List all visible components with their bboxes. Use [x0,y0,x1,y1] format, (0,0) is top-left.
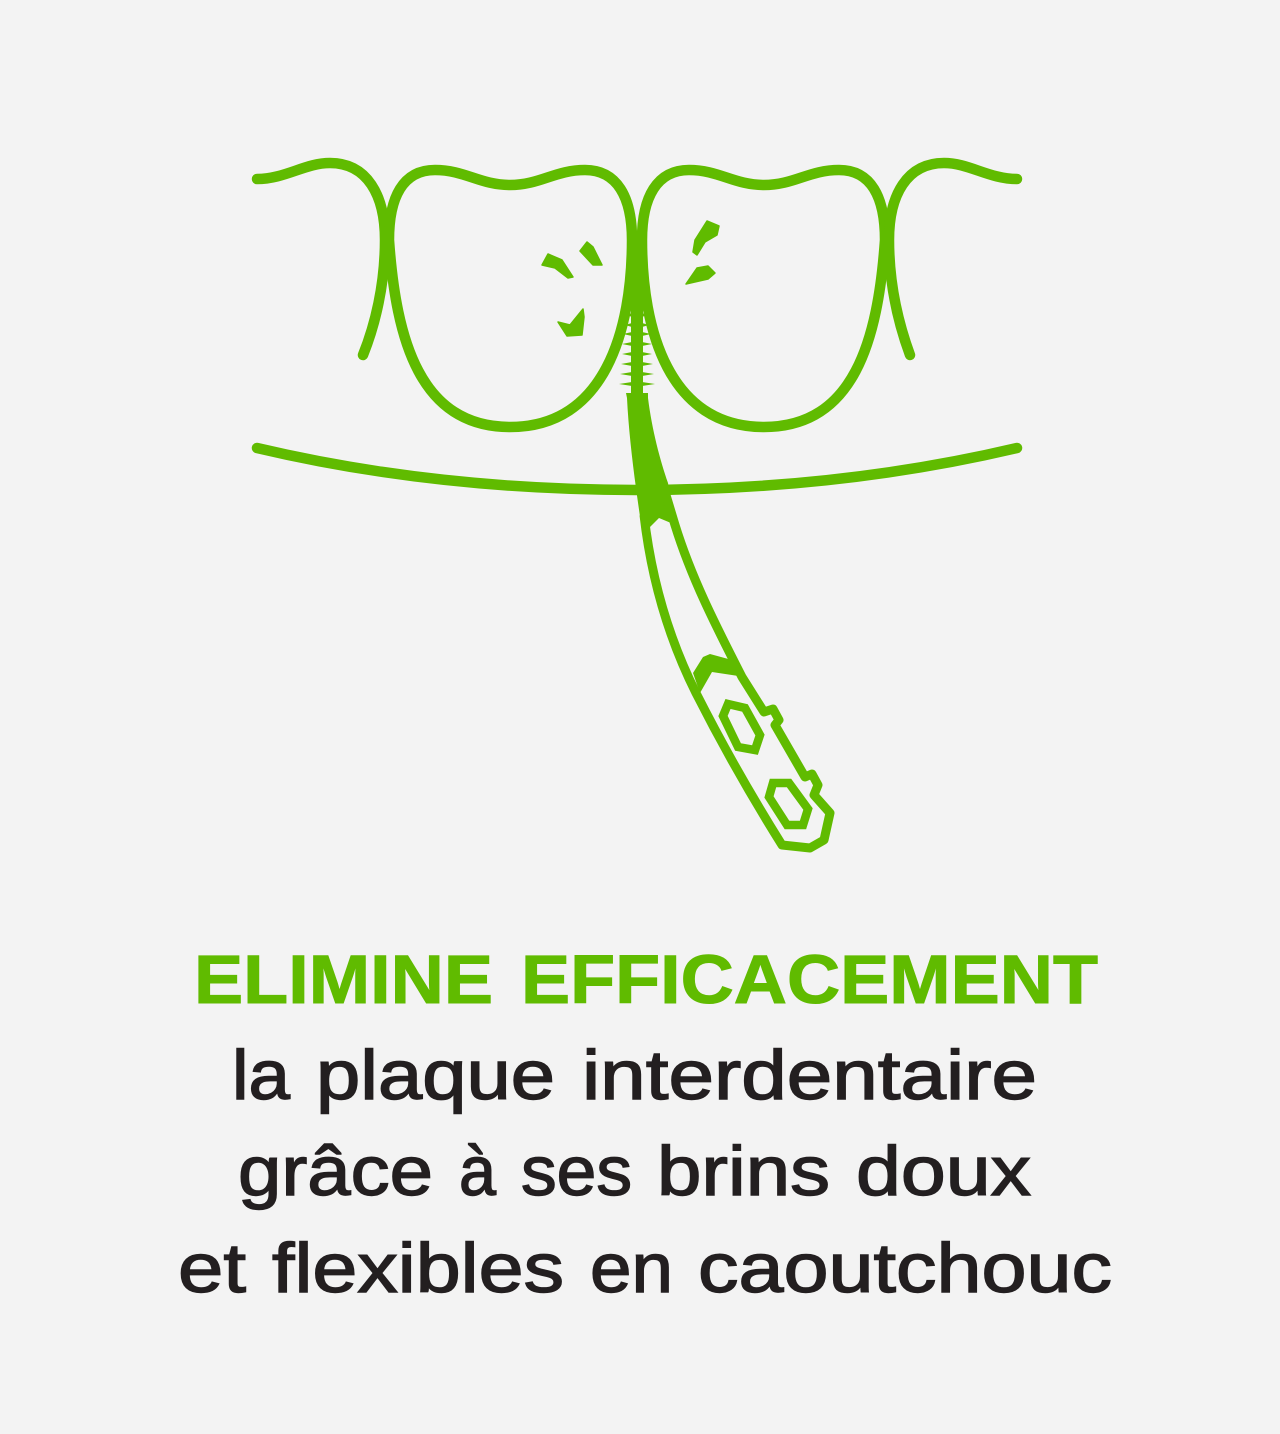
text block: description: caoutchouc [698,1229,1112,1307]
text block: description: grâce [238,1132,433,1210]
heading: EFFICACEMENT [521,941,1098,1018]
text block: description: à [459,1132,496,1210]
text block: description: brins [657,1132,830,1210]
heading: ELIMINE [194,941,493,1018]
icon: brush handle [626,393,830,848]
illustration: teeth with interdental brush [257,163,1017,848]
icon: teeth and gum outline [257,163,1017,490]
icon: brush bristles and stem [619,240,655,398]
text block: description: et [178,1229,246,1307]
icon: plaque debris [542,221,719,336]
text block: description: la [232,1036,290,1114]
text block: description: flexibles [272,1229,564,1307]
text block: description: doux [856,1132,1031,1210]
text block: description [178,1036,1112,1307]
text block: description: plaque [316,1036,555,1114]
text block: description: ses [521,1132,632,1210]
text block: description: interdentaire [582,1036,1037,1114]
text block: description: en [590,1229,673,1307]
heading [194,941,1098,1018]
